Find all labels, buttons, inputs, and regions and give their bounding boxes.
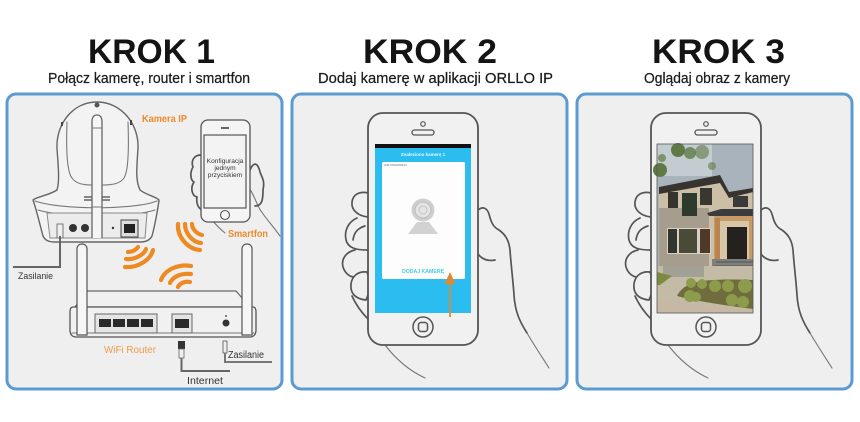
icon: phone (651, 113, 761, 345)
icon: smartphone with hand (191, 120, 280, 236)
app screen: Znaleziono kamerę 1 (401, 152, 446, 157)
icon: smartphone with hand: przyciskiem (208, 172, 243, 179)
title: step 1 (48, 33, 250, 87)
label: WiFi Router: WiFi Router (104, 345, 157, 356)
icon: internet cable (178, 341, 230, 371)
label: Zasilanie router: Zasilanie (228, 350, 264, 361)
title: step 1: Połącz kamerę, router i smartfon (48, 70, 250, 87)
icon: IP camera (33, 102, 159, 242)
icon: WiFi router (70, 244, 256, 337)
label: Zasilanie camera: Zasilanie (18, 271, 53, 282)
panel: step 1 connection diagram (7, 94, 282, 389)
icon: camera power cable (13, 236, 60, 267)
panel: step 2 add camera in app (292, 94, 567, 389)
icon: smartphone with hand: Konfiguracja (207, 158, 244, 165)
icon: wifi waves (125, 224, 202, 287)
house photo (653, 143, 753, 313)
label: Kamera IP: Kamera IP (142, 114, 187, 125)
icon: hand holding phone (626, 192, 832, 378)
icon: hand holding phone (343, 192, 549, 378)
title: step 2: KROK 2 (363, 33, 497, 71)
panel: step 3 watch camera feed (577, 94, 852, 389)
app screen: UID:VSUH00213 (384, 163, 407, 167)
app screen (375, 144, 471, 313)
icon: smartphone with hand: jednym (213, 165, 236, 172)
title: step 3 (644, 33, 790, 87)
title: step 2: Dodaj kamerę w aplikacji ORLLO IP (318, 70, 553, 87)
app screen: DODAJ KAMERĘ (402, 269, 445, 275)
label: Internet: Internet (187, 376, 223, 387)
title: step 1: KROK 1 (88, 33, 215, 71)
icon: phone (368, 113, 478, 345)
title: step 2 (318, 33, 553, 87)
label: Smartfon: Smartfon (228, 228, 268, 240)
title: step 3: Oglądaj obraz z kamery (644, 70, 790, 87)
icon: grey webcam (408, 198, 438, 234)
icon: router power cable (223, 341, 272, 362)
arrow (444, 272, 456, 317)
title: step 3: KROK 3 (652, 33, 785, 71)
